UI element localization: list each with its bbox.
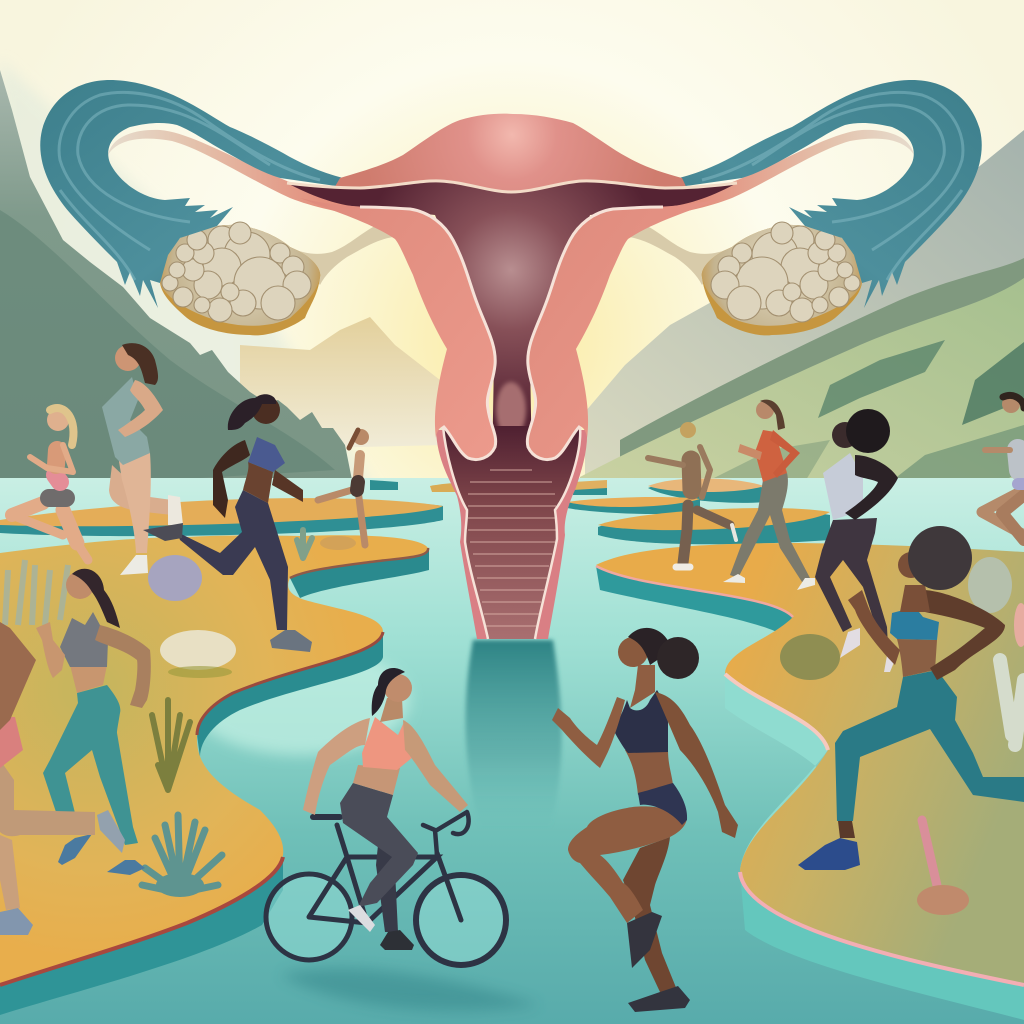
cervical canal with ridges [443,426,580,639]
right mountains [585,130,1024,490]
plants on right island [780,557,1024,915]
runner: small woman far right of river [648,422,736,567]
cavity top edge line [287,181,737,192]
runner: central woman in navy top [552,628,738,1012]
bicycle [266,812,506,965]
left fallopian tube and ovary [40,80,400,335]
left uterine wall [300,198,496,460]
left wall inner edge [360,207,496,460]
runner: woman at the right edge [982,395,1024,540]
right green hills [580,258,1024,528]
runner: woman in blue top with dark leggings [143,394,312,652]
runner: far-left blonde woman [12,408,88,560]
right uterine wall [527,198,723,460]
runner: small distant woman [318,429,369,545]
left side mist [0,60,380,500]
left middle island wall [290,548,429,598]
right fallopian tube and ovary [622,80,982,335]
left forested mountain [0,70,352,490]
left upper island [0,498,443,536]
uterine cavity [287,181,737,470]
uterus fundus dome [330,114,690,195]
runner: woman at the left edge [0,622,125,935]
bright water highlight [190,645,410,755]
river water [0,478,1024,1024]
walker: woman in white tank [815,409,898,672]
walker: woman in teal top [102,343,183,575]
uterus diagram [40,80,982,639]
left main island [0,535,428,1015]
central canal bulge [496,382,526,438]
cervix outer wall [436,430,587,639]
bicycle shadow on water [280,968,540,1011]
far small islands [370,478,830,544]
cyclist on a road bike [266,668,506,965]
plants on left island [5,530,356,897]
runner: woman in gray top and teal leggings [36,569,151,875]
right main island [596,543,1024,1020]
walker: woman in red top [723,400,815,590]
runner: woman in teal leggings with curly hair [798,526,1024,870]
rider [303,668,468,950]
distant centre mountains [240,317,445,450]
reflection of the cervix in the water [465,640,562,830]
right wall inner edge [527,207,663,460]
